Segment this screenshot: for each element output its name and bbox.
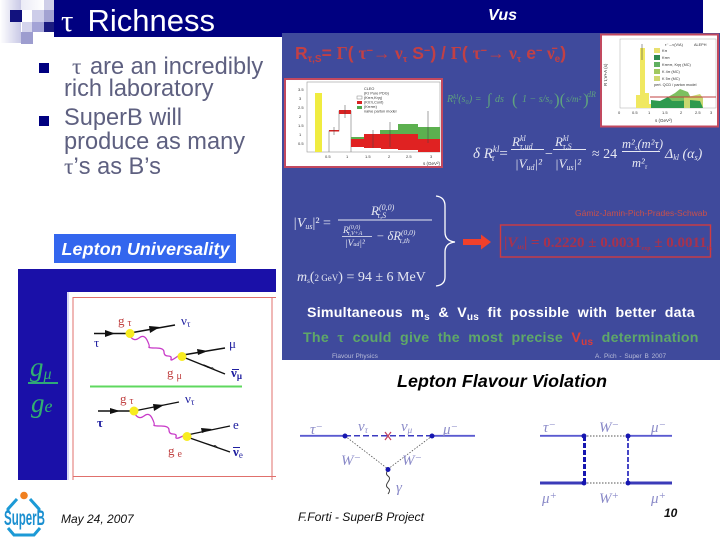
diagram: box LFV: τ — [543, 420, 548, 436]
chart: ALEPH spectrum: s (GeV²) — [655, 118, 673, 123]
chart: left spectrum — [285, 79, 442, 167]
feynman diagram: tau to mu: τ — [187, 319, 191, 329]
formula: R tau,S definition: Γ( τ — [451, 43, 481, 63]
bullet text 1: are an incredibly — [90, 54, 263, 80]
formula: moment definition: R — [447, 94, 453, 105]
formula: Vus squared: us — [305, 222, 313, 231]
diagram: penguin LFV: τ — [365, 425, 369, 435]
ratio g_mu / g_e — [28, 352, 58, 418]
formula: moment definition: dR — [587, 90, 596, 99]
ratio g_mu / g_e: μ — [42, 366, 52, 383]
feynman diagram: tau to e: τ — [191, 397, 195, 407]
arrow — [463, 234, 491, 250]
formula: moment definition: ds — [495, 94, 504, 105]
chart: left spectrum: 3 — [430, 154, 433, 159]
result box: th — [707, 246, 713, 252]
feynman diagram: tau to mu: ν — [231, 365, 237, 380]
footer author: F.Forti - SuperB Project — [298, 510, 425, 524]
formula: moment definition: τ — [453, 98, 456, 106]
legend: (Kππ,Kηη) — [364, 96, 383, 100]
page number: 10 — [664, 506, 678, 520]
formula: R tau,S definition: ) / — [430, 43, 451, 63]
formula: delta R: ≈ 24 — [592, 147, 617, 162]
formula: Vus squared: |² = — [313, 216, 331, 231]
legend: (Kτ Pure PDG) — [364, 92, 390, 96]
logo: SuperB: SuperB — [4, 507, 45, 530]
chart: left spectrum: 0.5 — [298, 141, 304, 146]
citation: Gamiz et al: Gámiz-Jamin-Pich-Prades-Schwab — [575, 208, 708, 218]
chart: left spectrum: s (GeV²) — [423, 161, 441, 166]
chart: ALEPH spectrum: Kππ — [662, 56, 670, 60]
feynman diagram: tau to mu: μ — [176, 371, 182, 382]
chart: ALEPH spectrum: 0.5 — [632, 110, 638, 115]
formula: strange quark mass: ( — [310, 270, 315, 285]
formula: R tau,S definition: → ν — [373, 43, 403, 63]
header decoration squares — [0, 0, 54, 44]
formula: Vus squared: |V — [293, 216, 305, 231]
diagram: box LFV: − — [659, 419, 666, 431]
feynman diagram: tau to mu — [94, 313, 242, 382]
chart: ALEPH spectrum: K 4π (MC) — [662, 70, 681, 74]
formula: strange quark mass: m — [297, 270, 307, 285]
formula: moment definition: 1 − s/s₀ — [522, 94, 553, 105]
formula: R tau,S definition: e — [521, 43, 536, 63]
formula: strange quark mass: 2 GeV) = 94 ± 6 MeV — [315, 270, 426, 285]
ratio g_mu / g_e: g — [31, 388, 44, 418]
formula: moment definition — [446, 90, 596, 109]
formula: delta R: kl — [493, 144, 500, 154]
chart: ALEPH spectrum: 0 — [618, 110, 621, 115]
brace — [436, 196, 455, 286]
diagram: penguin LFV: μ — [407, 425, 413, 435]
formula: strange quark mass: s — [307, 277, 310, 285]
chart: ALEPH spectrum: Kπ — [662, 49, 668, 53]
legend — [364, 87, 397, 114]
diagram: penguin LFV: τ — [310, 422, 315, 438]
formula: R tau,S definition: e — [555, 54, 561, 65]
formula: R tau,S definition: τ — [403, 54, 408, 65]
title: Richness — [88, 3, 215, 38]
statement: simultaneous fit: & V — [430, 305, 467, 321]
formula: delta R: kl — [673, 153, 680, 162]
formula: delta R: τ,ud — [520, 142, 534, 151]
formula: R tau,S definition: = — [322, 43, 337, 63]
formula: Vus squared: |Vud|² — [345, 239, 365, 249]
chart: left spectrum: 2.5 — [298, 105, 304, 110]
feynman diagram: tau to mu: τ — [128, 318, 132, 329]
chart: left spectrum: 2.5 — [406, 154, 412, 159]
formula: Vus squared: − δR — [376, 229, 401, 243]
formula: delta R: τ,S — [563, 142, 572, 151]
formula: delta R: us — [567, 163, 574, 172]
formula: R tau,S definition: Γ( τ — [337, 43, 367, 63]
formula: moment definition: (s₀) = — [456, 94, 481, 105]
feynman diagram: tau to e: ν — [185, 391, 191, 406]
formula: R tau,S definition: ν̄ — [542, 43, 558, 63]
ratio g_mu / g_e: e — [44, 396, 52, 416]
chart: ALEPH spectrum: 1.5 — [662, 110, 668, 115]
statement: precise Vus: us — [581, 337, 593, 348]
formula: Vus squared — [293, 203, 432, 249]
formula: Vus squared: τ,th — [399, 236, 410, 245]
feynman diagram: tau to e: τ — [130, 396, 134, 407]
bullet text 1: τ — [72, 54, 81, 80]
formula: delta R: δ R — [473, 146, 493, 162]
diagram: box LFV: μ — [542, 491, 550, 507]
formula: moment definition: s/m² — [566, 94, 582, 104]
diagram: penguin LFV: − — [451, 421, 458, 433]
formula: delta R: (α — [679, 147, 695, 162]
statement: precise Vus: determination — [593, 330, 699, 346]
feynman diagram: tau to mu: μ — [237, 371, 242, 381]
credit: Flavour Physics: Flavour Physics — [332, 353, 379, 360]
feynman diagram: tau to mu: τ — [94, 335, 99, 350]
chart: left spectrum: 1.5 — [365, 154, 371, 159]
formula: delta R: − — [545, 147, 553, 162]
formula: Vus squared: R — [371, 203, 379, 218]
ratio g_mu / g_e: g — [30, 352, 44, 382]
feynman diagram: tau to e: g — [120, 391, 126, 406]
feynman diagram: tau to e: e — [233, 417, 239, 432]
bullet text 1: rich laboratory — [64, 76, 214, 102]
chart: ALEPH spectrum: 2 — [680, 110, 683, 115]
formula: R tau,S definition: τ — [517, 54, 522, 65]
feynman diagram: tau to mu: ν — [181, 313, 187, 328]
formula: delta R: |V — [515, 156, 527, 171]
diagram: penguin LFV: − — [354, 452, 361, 464]
divider between diagrams — [90, 386, 242, 388]
feynman diagram: tau to e: ν — [233, 444, 239, 459]
formula: delta R: s — [635, 144, 638, 152]
statement: simultaneous fit: fit possible with better data — [479, 305, 695, 321]
feynman diagram: tau to mu: μ — [229, 336, 236, 351]
heading: Lepton Flavour Violation: Lepton Flavour Violation — [397, 371, 607, 391]
formula: Vus squared: R — [343, 226, 349, 236]
chart: left spectrum: 3.5 — [298, 87, 304, 92]
diagram: box LFV: + — [550, 490, 557, 502]
chart: left spectrum: 1 — [299, 132, 302, 137]
formula: R tau,S definition: − — [536, 45, 542, 57]
diagram: box LFV: + — [612, 490, 619, 502]
chart: ALEPH spectrum: 2.5 — [695, 110, 701, 115]
feynman diagram: tau to e: e — [239, 450, 243, 460]
bullet text 2: SuperB will — [64, 105, 182, 131]
chart: ALEPH spectrum: R τ,V+A (s) — [603, 63, 608, 86]
diagram: box LFV: − — [612, 419, 619, 431]
chart: ALEPH spectrum: τ⁻→ν(V/A) — [665, 43, 684, 47]
formula: R tau,S definition: R — [295, 43, 308, 63]
diagram: box LFV: W — [599, 491, 612, 507]
formula: delta R: ) — [697, 147, 703, 162]
result box: ± 0.0011 — [651, 235, 707, 251]
result box: | = 0.2220 ± 0.0031 — [524, 235, 642, 251]
chart: left spectrum: 3 — [299, 96, 302, 101]
diagram: penguin LFV: − — [414, 452, 422, 464]
chart: left spectrum: 0.5 — [325, 154, 331, 159]
chart: left spectrum: 2 — [388, 154, 391, 159]
formula: delta R — [473, 134, 703, 172]
bullet list — [39, 54, 263, 180]
bullet marker 2 — [39, 116, 49, 126]
formula: R tau,S definition: ) — [560, 43, 566, 63]
formula: delta R: = — [495, 146, 508, 162]
formula: delta R: |² — [535, 156, 543, 171]
formula: moment definition: )( — [554, 90, 566, 109]
credit: A. Pich: A. Pich - Super B 2007 — [595, 353, 667, 360]
panel: lepton universality diagram — [18, 269, 276, 480]
diagram: penguin LFV: μ — [443, 422, 451, 438]
legend: (Kππ,Cont) — [364, 100, 384, 104]
feynman diagram: tau to mu: g — [167, 365, 174, 380]
formula: R tau,S definition: − — [367, 45, 373, 57]
diagram: box LFV — [540, 419, 672, 507]
diagram: penguin LFV — [300, 419, 475, 496]
panel: Vus blue slide — [282, 33, 720, 360]
formula: R tau,S definition: S — [407, 43, 424, 63]
label: Lepton Universality — [54, 234, 236, 263]
feynman diagram: tau to mu: g — [118, 313, 124, 328]
chart: ALEPH spectrum: pert. QCD / parton model — [654, 83, 697, 87]
footer date: May 24, 2007 — [61, 512, 135, 526]
diagram: box LFV: + — [659, 490, 666, 502]
formula: moment definition: ∫ — [486, 92, 493, 108]
diagram: box LFV: μ — [651, 420, 659, 436]
formula: moment definition: kl — [453, 93, 458, 101]
chart: left spectrum: 2 — [299, 114, 302, 119]
chart: left spectrum: 1 — [346, 154, 349, 159]
chart: ALEPH spectrum: 1 — [648, 110, 651, 115]
statement: precise Vus: The τ could give the most precise V — [303, 330, 581, 346]
statement: simultaneous fit: s — [424, 312, 430, 323]
formula: delta R: |² — [574, 156, 582, 171]
formula: Vus squared: (0,0) — [349, 224, 360, 231]
formula: Vus squared: (0,0) — [401, 228, 416, 237]
chart: left spectrum: 1.5 — [298, 123, 304, 128]
diagram: box LFV: μ — [651, 491, 659, 507]
formula: delta R: kl — [563, 134, 570, 143]
result box: us — [517, 243, 524, 251]
chart: ALEPH spectrum — [601, 34, 718, 126]
diagram: box LFV: W — [599, 420, 612, 436]
formula: delta R: |V — [555, 156, 567, 171]
formula: delta R: Δ — [665, 147, 673, 162]
formula: delta R: ud — [527, 163, 536, 172]
header bar — [54, 0, 703, 37]
formula: moment definition: ( — [512, 90, 518, 109]
feynman diagram: tau to e — [97, 391, 243, 460]
formula: delta R: kl — [520, 134, 527, 143]
formula: moment definition: ) — [583, 90, 589, 109]
bullet text 2: produce as many — [64, 129, 245, 155]
formula: delta R: τ — [491, 153, 495, 163]
result box: exp — [642, 246, 651, 252]
formula: R tau,S definition: − — [424, 45, 430, 57]
chart: ALEPH spectrum: ALEPH — [694, 43, 707, 47]
chart: ALEPH spectrum: Kπππ, Kηη (MC) — [662, 63, 691, 67]
formula: delta R: R — [555, 134, 563, 149]
title: τ — [61, 3, 73, 38]
diagram: penguin LFV: W — [402, 453, 414, 469]
diagram: penguin LFV: − — [315, 421, 323, 433]
bullet text 2: τ — [64, 154, 73, 180]
feynman diagram: tau to e: e — [178, 449, 182, 460]
legend: CLEO — [364, 87, 374, 91]
chart: ALEPH spectrum: K 5π (MC) — [662, 77, 681, 81]
result box: |V — [504, 235, 517, 251]
logo: SuperB — [4, 492, 45, 535]
diagram: penguin LFV: ν — [401, 419, 408, 435]
statement: simultaneous fit: Simultaneous m — [307, 305, 424, 321]
diagram: penguin LFV: W — [341, 453, 354, 469]
feynman diagram: tau to e: τ — [97, 415, 103, 430]
diagram: penguin LFV: ν — [358, 419, 365, 435]
formula: delta R: m² — [622, 137, 635, 151]
diagram: box LFV: − — [548, 419, 556, 431]
formula: delta R: τ — [645, 163, 648, 171]
statement: simultaneous fit: us — [467, 312, 479, 323]
formula: Vus squared: τ,V+A — [347, 231, 363, 237]
formula: Vus squared: (0,0) — [379, 203, 395, 212]
feynman diagram: tau to e: g — [168, 443, 174, 458]
legend: naïve parton model — [364, 110, 397, 114]
formula: delta R: (m²τ) — [638, 137, 663, 151]
formula: Vus squared: τ,S — [377, 211, 386, 220]
formula: R tau,S definition: τ,S — [308, 54, 322, 65]
formula: R tau,S definition: − — [481, 45, 487, 57]
formula: delta R: s — [695, 153, 698, 162]
label: Lepton Universality: Lepton Universality — [62, 239, 231, 259]
formula: R tau,S definition: → ν — [487, 43, 517, 63]
bullet marker 1 — [39, 63, 49, 73]
bullet text 2: ’s as B’s — [73, 154, 161, 180]
legend: (Kπππ) — [364, 105, 378, 109]
heading: Vus: Vus — [488, 7, 517, 24]
result box — [500, 225, 713, 257]
diagram: penguin LFV: γ — [396, 480, 403, 496]
formula: delta R: m² — [632, 156, 645, 170]
chart: ALEPH spectrum: 3 — [710, 110, 713, 115]
formula: delta R: R — [512, 134, 520, 149]
